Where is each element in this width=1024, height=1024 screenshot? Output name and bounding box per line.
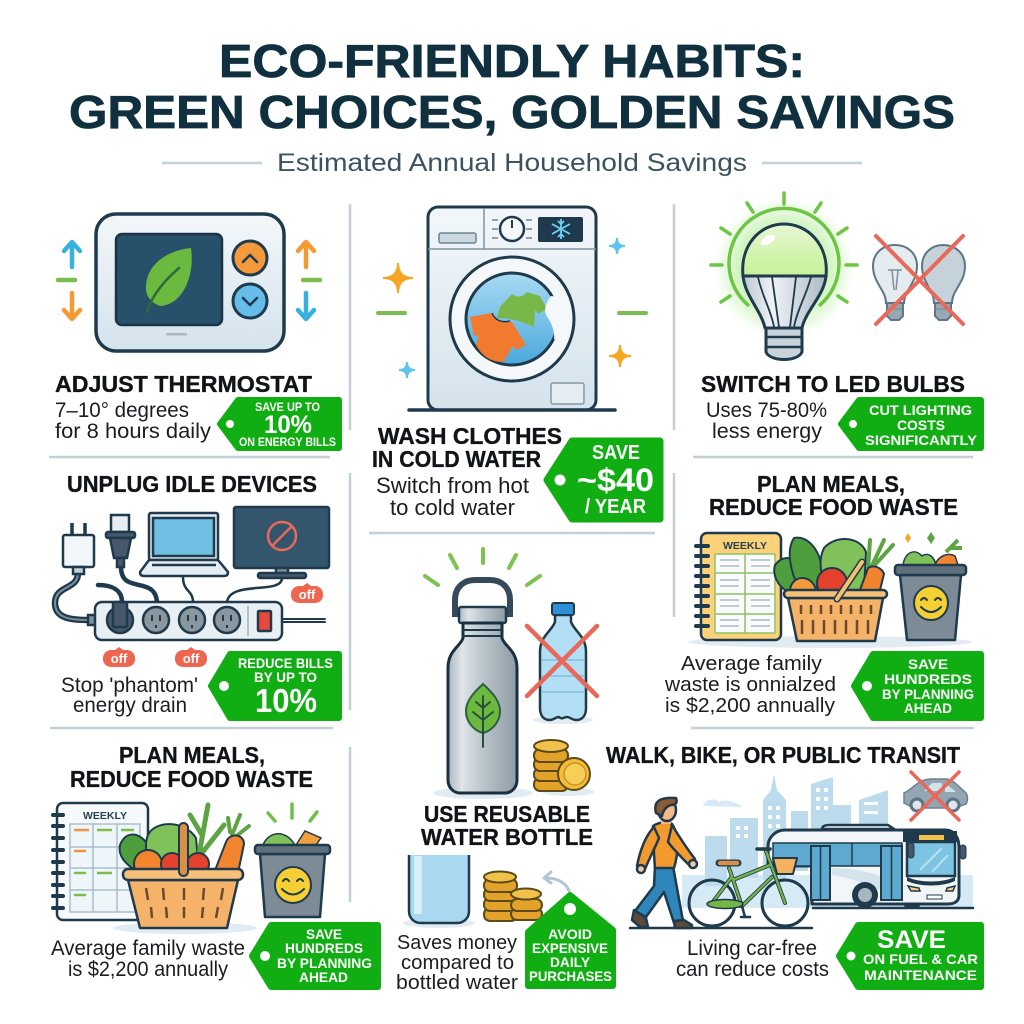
arrow: curved to tag — [544, 872, 569, 891]
tag: save up to 10% — [220, 400, 339, 449]
tag: save on fuel and car maintenance: MAINTENANCE — [864, 967, 977, 983]
icon: vegetables in basket — [774, 538, 893, 641]
description: Average family waste — [51, 937, 245, 960]
heading: wash clothes: IN COLD WATER — [372, 446, 541, 472]
panel: walk, bike or public transit — [606, 742, 981, 987]
icon: glass of water — [403, 855, 475, 928]
description: for 8 hours daily — [55, 420, 212, 443]
heading: plan meals — [709, 471, 958, 520]
tag: cut lighting costs — [841, 400, 981, 448]
tag: save $40 per year: SAVE — [592, 442, 640, 464]
description — [676, 937, 829, 981]
panel: use reusable water bottle — [396, 549, 613, 994]
description: bottled water — [396, 971, 518, 994]
description — [61, 674, 198, 717]
tag: avoid expensive purchases: DAILY — [550, 954, 591, 970]
tag: cut lighting costs: CUT LIGHTING — [869, 402, 972, 418]
label: off badges — [103, 583, 323, 667]
icon: coin stack — [534, 740, 594, 796]
icon: temperature arrows — [58, 242, 320, 319]
tag: save hundreds: BY PLANNING — [882, 686, 974, 702]
tag: reduce bills: BY UP TO — [254, 669, 317, 685]
icon: thermostat — [96, 214, 284, 351]
description — [376, 473, 529, 520]
label: off badges: off — [299, 587, 316, 602]
description: Living car-free — [687, 937, 817, 960]
description: Uses 75-80% — [706, 399, 827, 422]
description — [55, 399, 212, 443]
tag: save $40 per year: / YEAR — [585, 496, 647, 518]
heading: walk, bike or public transit: WALK, BIKE, OR PUBLIC TRANSIT — [606, 742, 961, 768]
heading: use reusable water bottle: USE REUSABLE — [424, 801, 590, 827]
icon: washing machine — [409, 207, 615, 410]
tag: save up to 10%: ON ENERGY BILLS — [239, 437, 336, 449]
icon: walking person — [632, 798, 697, 928]
tag: save hundreds: AHEAD — [299, 969, 348, 985]
tag: reduce bills: REDUCE BILLS — [238, 655, 333, 671]
label: off badges: off — [111, 651, 128, 666]
description: to cold water — [390, 495, 515, 520]
panel: adjust thermostat — [55, 214, 339, 449]
description: Switch from hot — [376, 473, 529, 498]
description — [706, 399, 827, 443]
tag: avoid expensive purchases: AVOID — [548, 926, 592, 942]
description — [396, 931, 518, 994]
panel: plan meals (right) — [664, 471, 981, 718]
description — [51, 937, 245, 981]
panel: plan meals (left) — [51, 742, 378, 987]
heading: use reusable water bottle — [421, 801, 593, 850]
tag: save up to 10%: 10% — [264, 411, 312, 439]
tag: cut lighting costs: SIGNIFICANTLY — [865, 432, 978, 448]
description: Average family — [681, 652, 823, 675]
tag: avoid expensive purchases — [528, 895, 613, 986]
label: off badges: off — [183, 651, 200, 666]
icon: crossed-out plastic bottle — [527, 603, 597, 724]
tag: save hundreds: BY PLANNING — [277, 955, 372, 971]
tag: save hundreds: AHEAD — [904, 700, 952, 716]
description: 7–10° degrees — [55, 399, 189, 422]
icon: bus — [768, 825, 966, 908]
panel: unplug idle devices — [55, 471, 339, 719]
tag: cut lighting costs: COSTS — [897, 417, 945, 433]
icon: coin stacks — [484, 872, 542, 921]
icon: power cords — [55, 567, 325, 622]
icon: weekly calendar: WEEKLY — [83, 810, 127, 822]
description: can reduce costs — [676, 958, 829, 981]
title — [69, 35, 955, 138]
tag: save hundreds — [854, 654, 981, 718]
icon: monitor — [234, 507, 329, 578]
icon: weekly planner — [696, 533, 781, 640]
icon: smiling compost bin — [895, 532, 966, 640]
description: compared to — [401, 951, 514, 974]
title: GREEN CHOICES, GOLDEN SAVINGS — [69, 86, 955, 138]
icon: wall charger — [63, 523, 94, 574]
tag: save $40 per year: ~$40 — [577, 462, 654, 498]
heading: wash clothes — [372, 423, 562, 472]
panel: switch to LED bulbs — [701, 193, 981, 448]
heading: adjust thermostat: ADJUST THERMOSTAT — [55, 371, 313, 397]
icon: shadow — [113, 922, 257, 934]
tag: avoid expensive purchases: EXPENSIVE — [532, 940, 608, 956]
heading: plan meals: REDUCE FOOD WASTE — [70, 766, 313, 792]
tag: save $40 per year — [547, 441, 660, 519]
tag: reduce bills: 10% — [255, 682, 317, 719]
tag: save on fuel and car maintenance: SAVE — [877, 926, 946, 954]
icon: city skyline — [682, 774, 973, 908]
icon: laptop — [140, 513, 228, 576]
icon: crossed-out car — [904, 772, 968, 820]
panel: wash clothes in cold water — [372, 207, 660, 520]
icon: power strip — [88, 602, 282, 640]
icon: smiling compost bin — [255, 804, 330, 917]
description — [664, 652, 836, 717]
icon: vegetables in basket — [120, 805, 249, 928]
heading: plan meals: PLAN MEALS, — [757, 471, 905, 497]
icon: green rays — [425, 549, 540, 585]
heading: unplug idle devices: UNPLUG IDLE DEVICES — [67, 471, 317, 497]
icon: LED bulb — [711, 193, 857, 360]
tag: save up to 10%: SAVE UP TO — [255, 402, 320, 414]
tag: save hundreds: SAVE — [306, 926, 342, 942]
icon: bicycle — [689, 849, 808, 926]
icon: sparkles — [378, 238, 646, 378]
icon: crossed-out old bulbs — [873, 236, 965, 324]
heading: plan meals — [70, 742, 313, 792]
icon: weekly calendar — [53, 803, 148, 920]
description: less energy — [712, 420, 823, 443]
tag: save on fuel and car maintenance: ON FUEL & CAR — [863, 951, 978, 967]
tag: avoid expensive purchases: PURCHASES — [529, 968, 612, 984]
tag: save hundreds: HUNDREDS — [884, 671, 972, 687]
description: Stop 'phantom' — [61, 674, 198, 697]
heading: switch to LED bulbs: SWITCH TO LED BULBS — [701, 371, 965, 397]
icon: reusable steel bottle — [433, 580, 533, 799]
tag: reduce bills — [211, 654, 339, 719]
heading: plan meals: REDUCE FOOD WASTE — [709, 494, 958, 520]
heading: plan meals: PLAN MEALS, — [119, 742, 265, 768]
heading: wash clothes: WASH CLOTHES — [378, 423, 562, 449]
icon: ground lines — [630, 908, 973, 928]
icon: shadow — [688, 636, 972, 648]
icon: weekly planner: WEEKLY — [723, 540, 767, 552]
description: waste is onnialzed — [664, 673, 836, 696]
subtitle: Estimated Annual Household Savings — [277, 149, 747, 177]
description: energy drain — [73, 694, 187, 717]
description: Saves money — [397, 931, 518, 954]
description: is $2,200 annually — [665, 694, 836, 717]
heading: use reusable water bottle: WATER BOTTLE — [421, 824, 593, 850]
tag: save hundreds: HUNDREDS — [285, 940, 363, 956]
tag: save hundreds — [252, 925, 378, 987]
title: ECO-FRIENDLY HABITS: — [219, 35, 805, 87]
description: is $2,200 annually — [68, 958, 228, 981]
icon: USB plug — [106, 515, 135, 567]
tag: save on fuel and car maintenance — [839, 925, 981, 987]
tag: save hundreds: SAVE — [908, 656, 948, 672]
